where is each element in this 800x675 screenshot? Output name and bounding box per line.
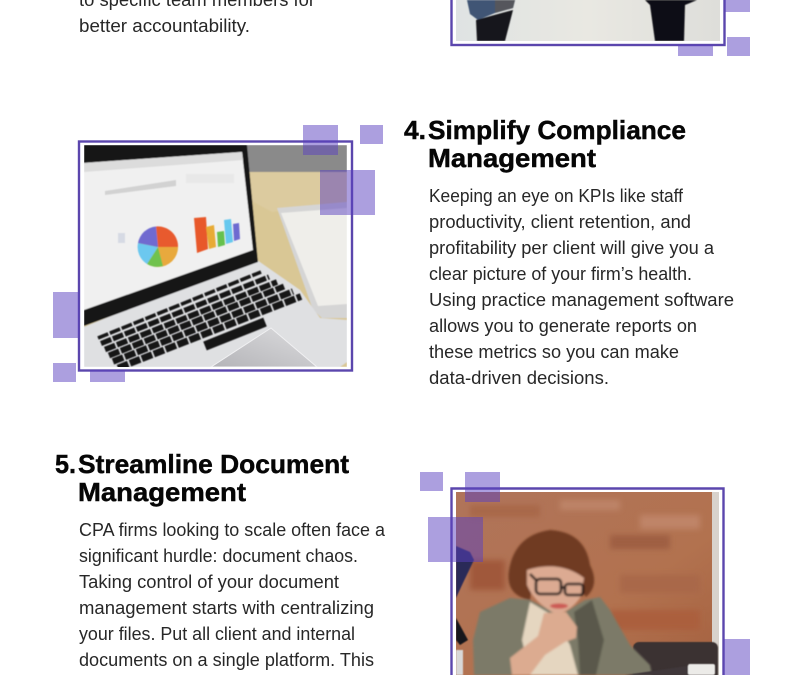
image panel: two people, cropped at top [456,0,720,41]
image frame section 5 [452,488,724,675]
decorative squares section 5 [420,472,750,675]
woman [473,530,652,675]
decorative squares section 4 [53,125,383,382]
section 5 heading: 5. [55,449,76,479]
section 4 heading: Management [428,143,596,173]
text block: end of section 3: better accountability. [79,16,250,36]
figure: left person [467,0,515,41]
section 5 body text: documents on a single platform. This [79,650,374,670]
section 5 heading [55,449,349,507]
section 4 body text: these metrics so you can make [429,342,679,362]
section 4 body text: allows you to generate reports on [429,316,697,336]
section 4 body text: profitability per client will give you a [429,238,715,258]
blouse [522,602,578,675]
jacket [473,597,652,675]
section 4 body text: clear picture of your firm’s health. [429,264,692,284]
screen [84,152,253,310]
image frame top [452,0,724,45]
section 4 heading [404,115,686,173]
hair [508,530,594,600]
section 4 body text: productivity, client retention, and [429,212,691,232]
decorative squares top [678,0,750,56]
section 4 body text: Keeping an eye on KPIs like staff [429,186,684,206]
section 5 heading: Streamline Document [78,449,349,479]
sofa [633,642,718,675]
glasses [530,574,583,595]
laptop and cup [625,664,715,675]
bar chart [194,217,240,253]
section 4 body text [429,186,734,388]
lips [550,603,568,609]
section 4 heading: Simplify Compliance [428,115,686,145]
section 5 body text [79,520,386,670]
section 5 body text: Taking control of your document [79,572,339,592]
keyboard [98,272,301,368]
image panel: laptop showing charts [84,145,347,368]
section 5 body text: CPA firms looking to scale often face a [79,520,386,540]
section 4 heading: 4. [404,115,426,145]
image panel: woman at laptop [456,492,719,675]
pie chart [138,226,178,267]
section 5 body text: management starts with centralizing [79,598,374,618]
section 5 body text: your files. Put all client and internal [79,624,355,644]
trackpad [211,328,317,367]
text block: end of section 3 [79,0,315,36]
screen bezel [84,145,258,326]
tablet [277,202,347,318]
image frame section 4 [79,142,352,370]
brick texture [470,500,700,630]
figure: right person [645,0,697,41]
face [527,566,584,614]
hand and arm [510,612,577,675]
section 5 heading: Management [78,477,246,507]
section 4 body text: Using practice management software [429,290,734,310]
section 4 body text: data-driven decisions. [429,368,609,388]
laptop base [84,258,347,367]
chair [456,546,474,675]
section 5 body text: significant hurdle: document chaos. [79,546,358,566]
